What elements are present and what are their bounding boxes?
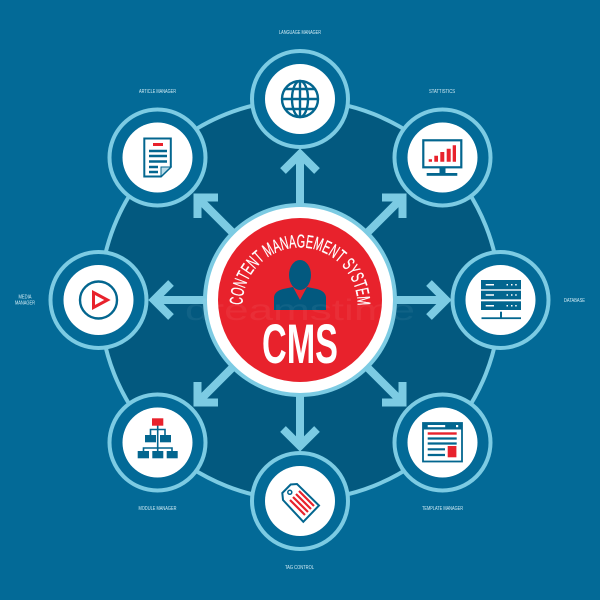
label: media manager — [15, 294, 35, 306]
node: tag control — [252, 453, 348, 549]
label: language manager: LANGUAGE MANAGER — [279, 30, 321, 36]
node: template manager — [394, 394, 490, 490]
icon: hierarchy — [138, 418, 178, 458]
node: language manager — [252, 51, 348, 147]
label: tag control: TAG CONTROL — [285, 565, 314, 571]
curved heading: CONTENT MANAGEMENT SYSTEM — [230, 234, 370, 305]
label: media manager: MEDIA — [18, 294, 32, 300]
icon: document — [144, 138, 171, 176]
icon: tag — [282, 484, 319, 522]
arrow: right — [385, 283, 446, 317]
arrows — [154, 154, 446, 446]
label: module manager: MODULE MANAGER — [138, 506, 176, 512]
label: media manager: MANAGER — [15, 300, 35, 306]
icon: globe — [282, 81, 318, 117]
icon: person — [274, 260, 326, 310]
arrow: down — [283, 385, 317, 446]
centre badge — [203, 203, 397, 397]
label: statistics: STATTISTICS — [429, 89, 455, 95]
icon: play button — [80, 282, 117, 318]
node: article manager — [110, 110, 206, 206]
label: article manager: ARTICLE MANAGER — [139, 89, 176, 95]
label: template manager: TEMPLATE MANAGER — [422, 506, 463, 512]
arrow: down-right — [360, 360, 402, 402]
CMS title: CMS — [262, 312, 338, 375]
icon: monitor chart — [423, 140, 461, 176]
watermark: dreamstime — [185, 294, 415, 327]
icon: browser window — [423, 423, 462, 462]
label: database: DATABASE — [564, 298, 585, 304]
dark central disc ring — [100, 100, 500, 500]
node: media manager — [50, 252, 146, 348]
arrow: left — [154, 283, 215, 317]
arrow: up — [283, 154, 317, 215]
arrow: up-right — [360, 198, 402, 240]
node: database — [452, 252, 548, 348]
node: statistics — [394, 110, 490, 206]
arrow: down-left — [198, 360, 240, 402]
node: module manager — [110, 394, 206, 490]
arrow: up-left — [198, 198, 240, 240]
icon: server — [481, 280, 521, 319]
